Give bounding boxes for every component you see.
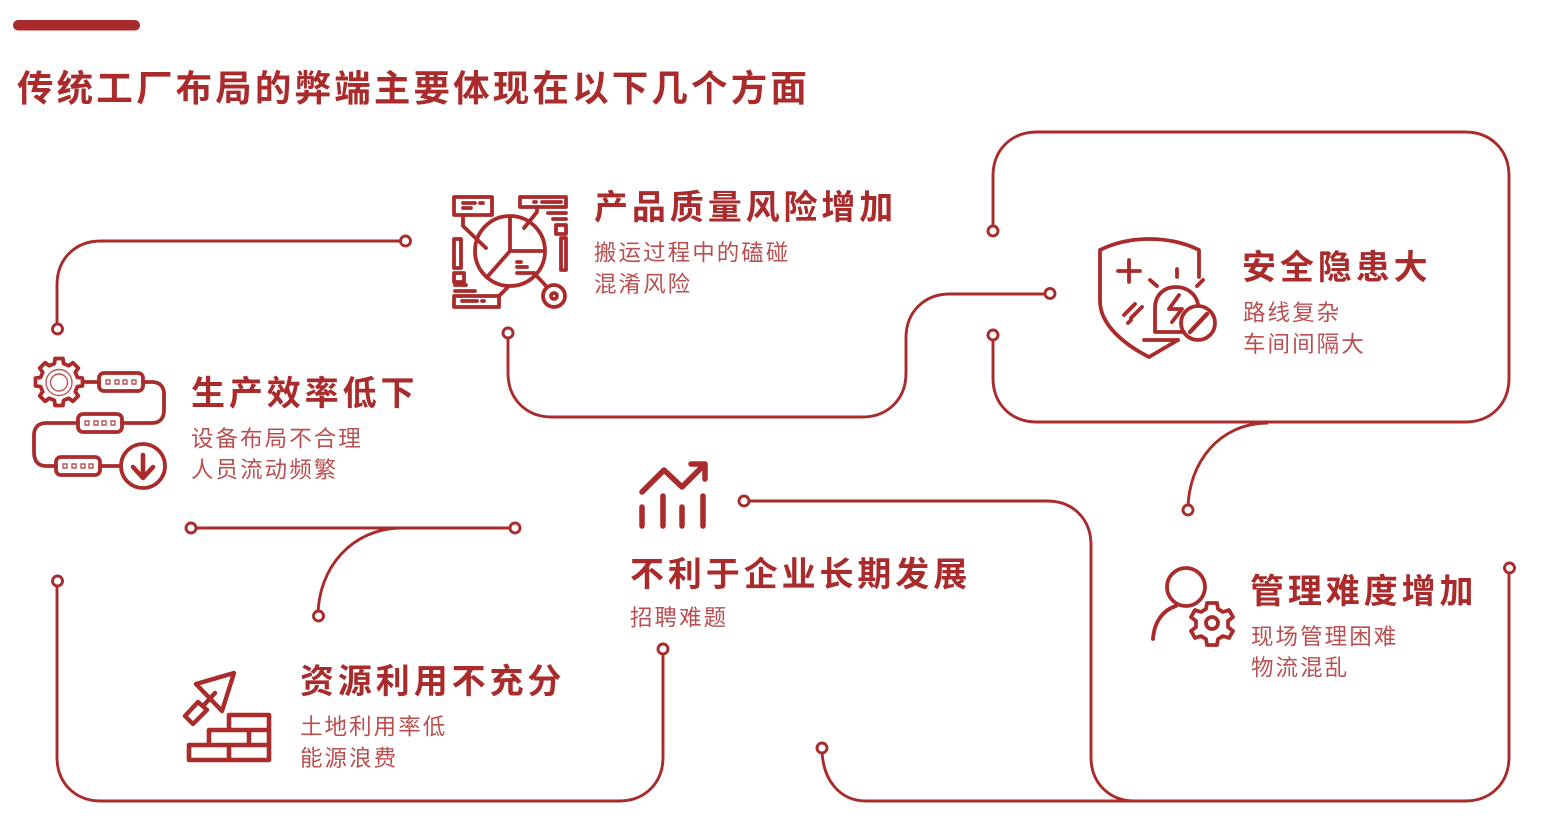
icon: pie chart analysis: [454, 197, 566, 307]
description: 人员流动频繁: [191, 458, 338, 482]
heading: 不利于企业长期发展: [630, 556, 971, 594]
panel: long-term development: [630, 464, 971, 630]
heading: 管理难度增加: [1250, 573, 1477, 611]
icon: shield with alarm: [1100, 239, 1215, 357]
connector: top right box: [988, 132, 1509, 422]
description: 车间间隔大: [1243, 332, 1366, 357]
connector: bottom left box: [52, 576, 668, 801]
description: 招聘难题: [630, 606, 728, 630]
title: 传统工厂布局的弊端主要体现在以下几个方面: [17, 68, 810, 109]
panel: production efficiency: [34, 358, 418, 488]
description: 路线复杂: [1243, 300, 1341, 326]
icon: growth chart: [642, 464, 705, 526]
heading: 产品质量风险增加: [594, 189, 897, 227]
description: 物流混乱: [1251, 656, 1349, 680]
description: 搬运过程中的磕碰: [594, 240, 790, 266]
heading: 安全隐患大: [1242, 249, 1432, 287]
description: 能源浪费: [300, 746, 398, 771]
connector: top left: [52, 236, 410, 334]
panel: safety hazards: [1100, 239, 1432, 357]
description: 混淆风险: [594, 272, 692, 297]
icon: gear process flow: [34, 358, 165, 488]
accent bar: [13, 20, 140, 30]
connector: right branch: [1183, 423, 1268, 515]
connector: center to bottom right: [739, 496, 1135, 801]
connector: middle S curve: [503, 288, 1055, 417]
panel: resource waste: [185, 663, 565, 771]
panel: management difficulty: [1153, 568, 1477, 680]
description: 设备布局不合理: [191, 426, 363, 452]
description: 现场管理困难: [1251, 624, 1398, 650]
panel: product quality: [454, 189, 897, 307]
heading: 生产效率低下: [191, 375, 418, 413]
icon: trowel and bricks: [185, 673, 269, 760]
connector: bottom right box: [817, 563, 1514, 801]
description: 土地利用率低: [300, 714, 447, 740]
connector: lower left bar: [186, 523, 520, 621]
icon: person with gear: [1153, 568, 1233, 645]
heading: 资源利用不充分: [300, 663, 565, 701]
